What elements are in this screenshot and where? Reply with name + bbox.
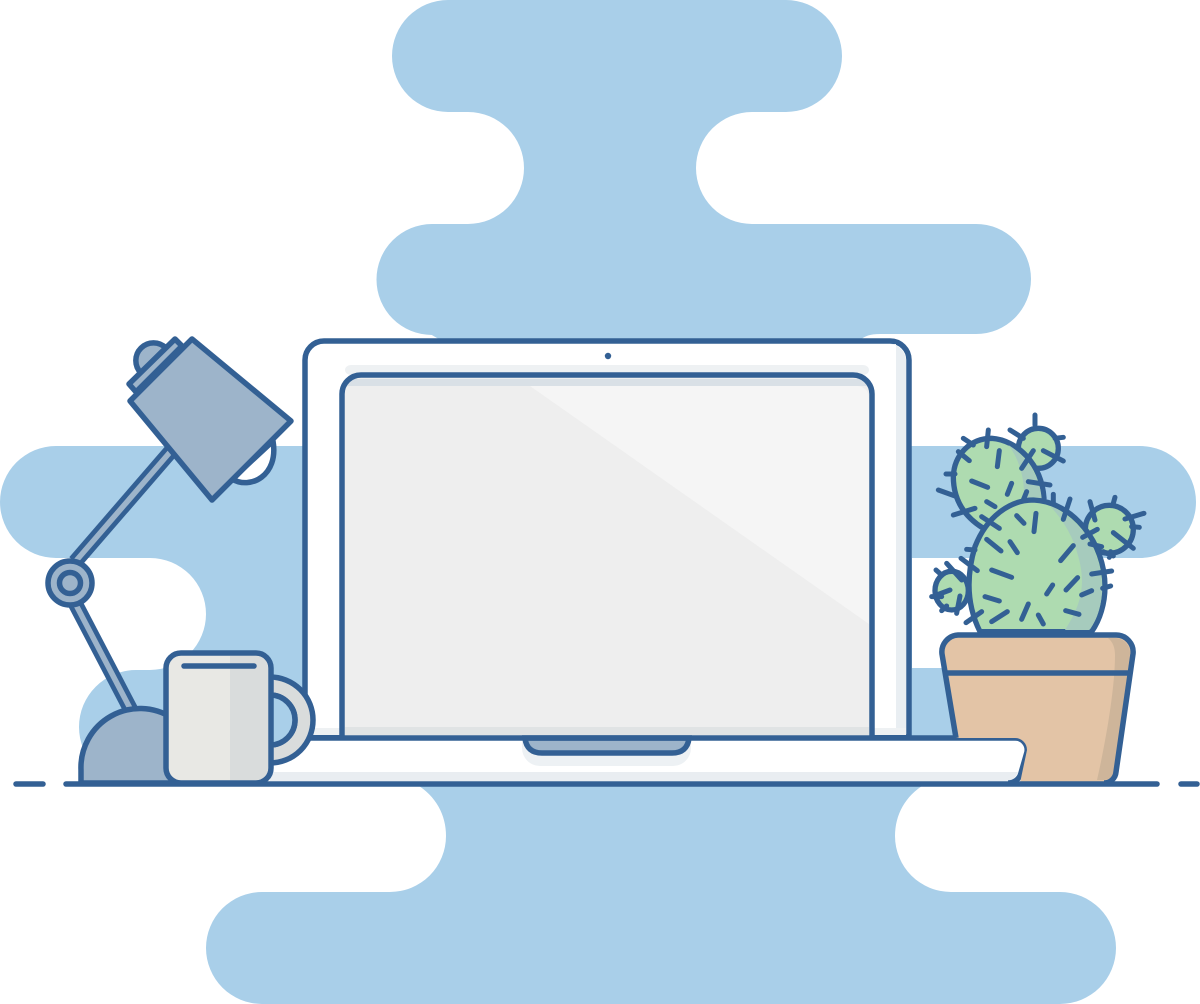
mug handle opening bbox=[270, 695, 295, 745]
pot rim line bbox=[946, 670, 1130, 676]
cactus small top pad bbox=[1018, 428, 1058, 468]
lamp shade bbox=[130, 339, 291, 500]
mug rim line bbox=[184, 663, 254, 669]
laptop lid bbox=[305, 341, 909, 737]
cactus back pad shading bbox=[1008, 445, 1042, 500]
coffee mug bbox=[166, 653, 313, 783]
lamp lower arm bbox=[75, 603, 133, 714]
cactus spines bbox=[932, 415, 1144, 624]
laptop base bbox=[262, 738, 1027, 783]
camera dot bbox=[605, 353, 611, 359]
cactus shading bbox=[1050, 506, 1102, 630]
pot body bbox=[942, 635, 1133, 783]
lamp upper arm bbox=[75, 451, 171, 562]
pot shading bbox=[1097, 638, 1130, 780]
cactus back pad bbox=[953, 438, 1044, 528]
laptop bbox=[262, 341, 1027, 783]
lamp base bbox=[81, 709, 172, 783]
lamp knob bbox=[136, 343, 166, 373]
flower pot bbox=[942, 635, 1133, 783]
cactus right pad bbox=[1085, 505, 1133, 553]
laptop screen bbox=[342, 375, 872, 736]
desk lamp bbox=[48, 339, 291, 783]
mug shaded side bbox=[230, 656, 268, 780]
desk line bbox=[16, 781, 1197, 787]
lamp bulb bbox=[232, 441, 274, 483]
cactus plant bbox=[932, 415, 1144, 632]
mug handle bbox=[270, 677, 313, 763]
pot outline bbox=[942, 635, 1133, 783]
mug body bbox=[166, 653, 271, 783]
lamp cap bbox=[129, 339, 182, 392]
lamp joint bbox=[48, 561, 92, 605]
cactus main pad bbox=[969, 500, 1105, 632]
cactus left pad bbox=[935, 571, 968, 610]
